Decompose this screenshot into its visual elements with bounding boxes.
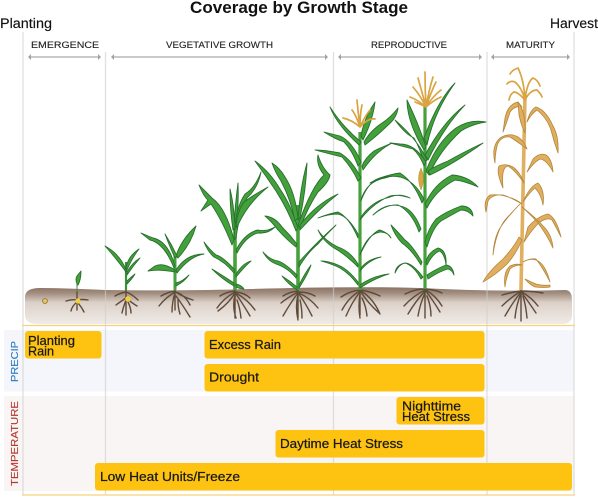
stage: vegetative growth: VEGETATIVE GROWTH <box>166 40 273 50</box>
stage: vegetative growth <box>111 40 328 60</box>
row label: precip: PRECIP <box>9 341 21 382</box>
plant: seed <box>43 299 47 303</box>
plant: silking <box>370 72 486 318</box>
stage: reproductive: REPRODUCTIVE <box>371 40 447 50</box>
stage: reproductive <box>338 40 482 60</box>
bar: daytime heat stress <box>276 430 484 458</box>
stage headers <box>28 40 570 60</box>
stage: maturity <box>491 40 570 60</box>
plant: V3 <box>141 226 204 317</box>
soil <box>25 287 572 324</box>
bar: nighttime heat stress <box>396 397 484 424</box>
stage: emergence <box>28 40 101 60</box>
bar: daytime heat stress: Daytime Heat Stress <box>280 437 403 451</box>
bar: planting rain <box>25 331 102 358</box>
plant: sprout <box>66 271 88 312</box>
plant: V1 seedling <box>105 246 140 315</box>
bar: excess rain: Excess Rain <box>209 338 281 352</box>
row label: temperature: TEMPERATURE <box>9 401 21 486</box>
plant: V8 <box>255 155 338 320</box>
stage: maturity: MATURITY <box>506 40 555 50</box>
bar: drought: Drought <box>209 370 260 384</box>
plant: V6 <box>199 172 275 318</box>
bar: low heat units/freeze <box>95 463 572 490</box>
plant: mature dry corn <box>483 68 561 321</box>
bar: excess rain <box>204 331 484 358</box>
bar: planting rain: Rain <box>28 344 54 358</box>
bar: nighttime heat stress: Nighttime <box>402 400 461 414</box>
bar: low heat units/freeze: Low Heat Units/Freeze <box>100 470 240 484</box>
bar: drought <box>204 364 484 392</box>
temperature band <box>4 396 574 491</box>
bar: planting rain: Planting <box>28 334 75 348</box>
label: harvest: Harvest <box>550 16 598 31</box>
bar: nighttime heat stress: Heat Stress <box>402 410 470 424</box>
stage: emergence: EMERGENCE <box>31 40 99 50</box>
label: planting: Planting <box>0 16 52 31</box>
precipitation band <box>4 330 574 392</box>
plant: tasseling <box>315 100 410 318</box>
